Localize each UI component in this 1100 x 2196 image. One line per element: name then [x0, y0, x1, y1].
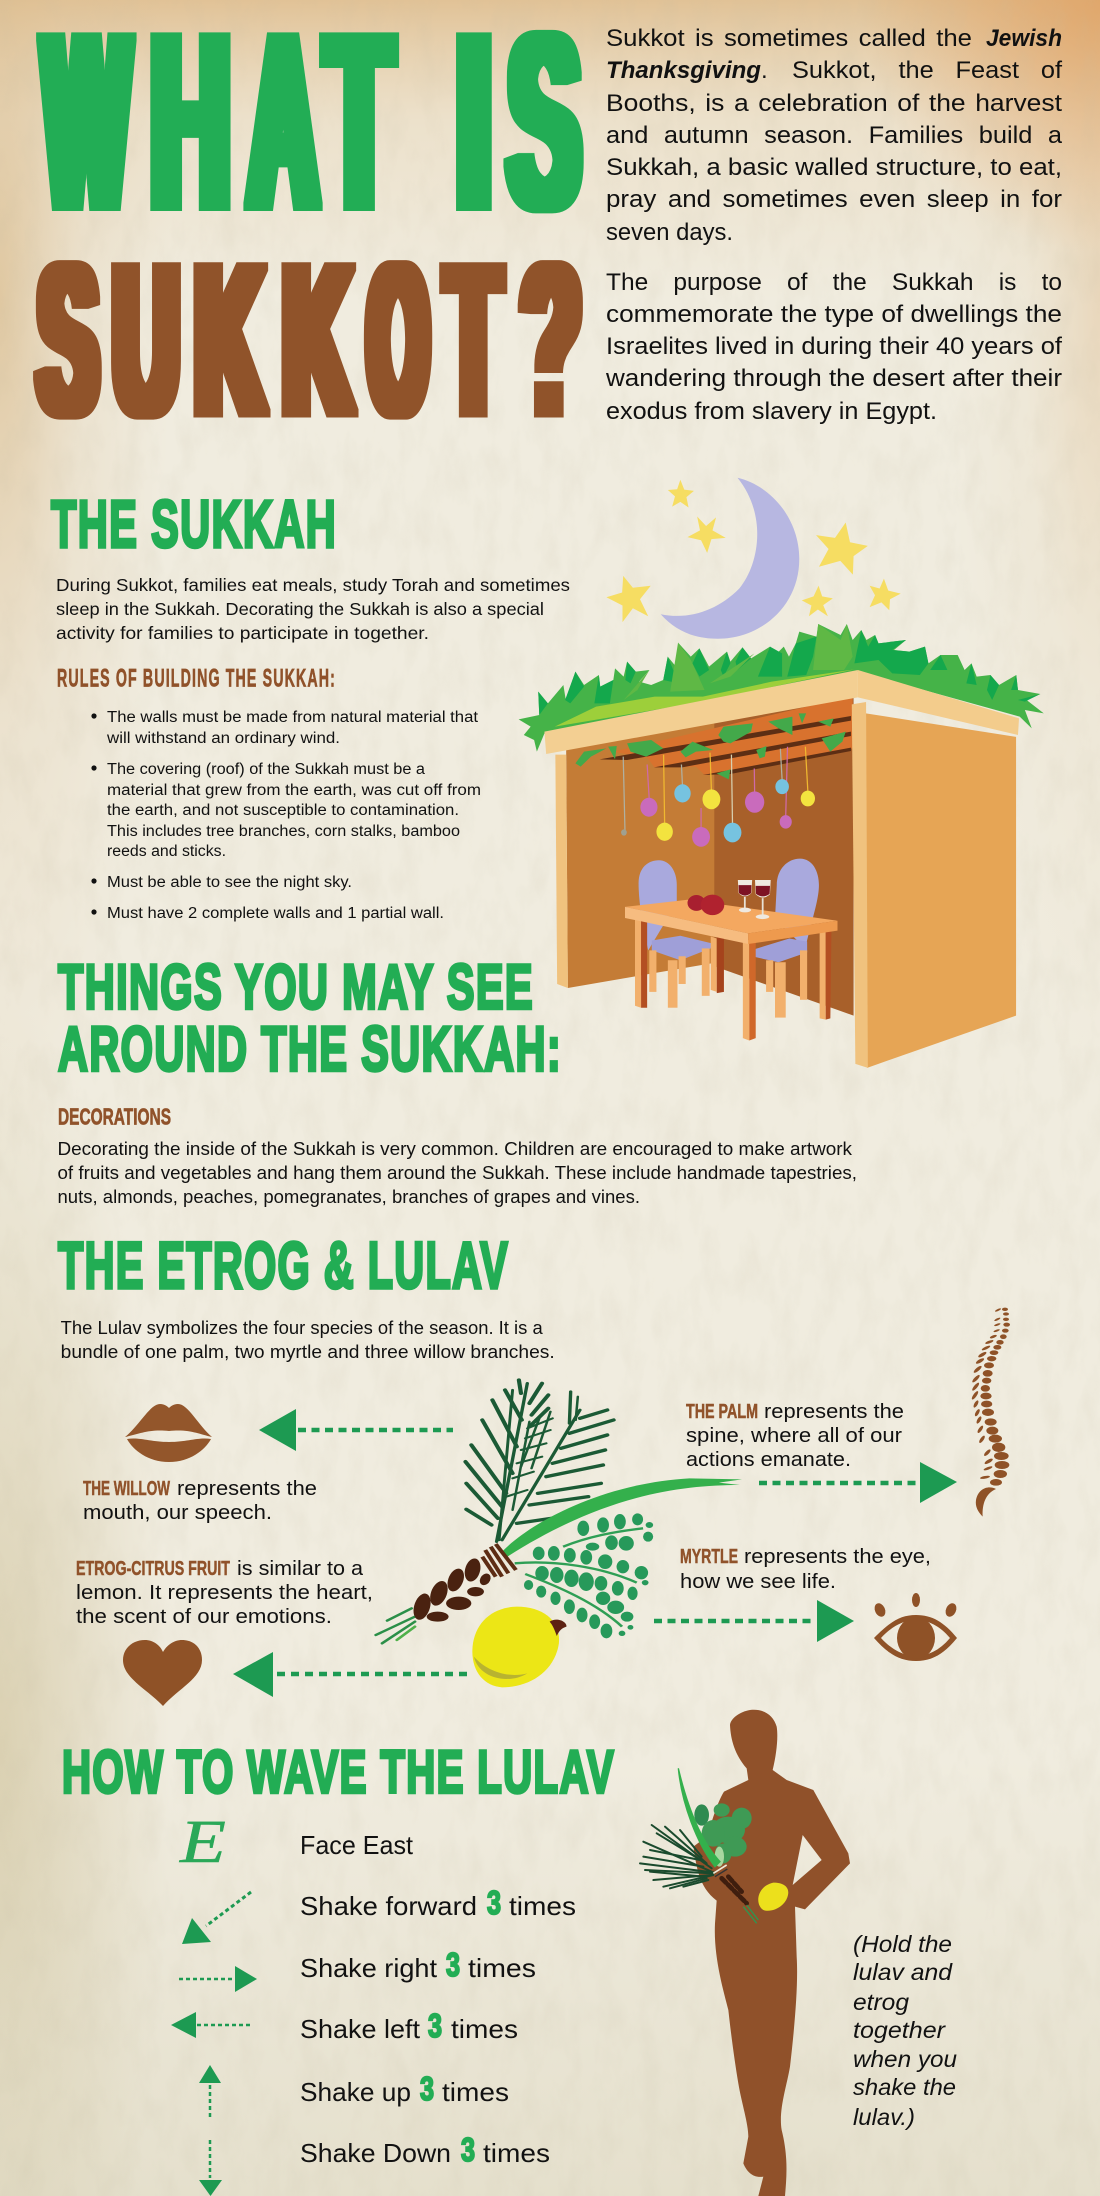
rafters — [613, 696, 853, 775]
person: etrog — [758, 1883, 788, 1911]
person: lulav frond — [678, 1768, 720, 1867]
sukkah: roof beam right — [858, 670, 1019, 735]
text: myrtle: how we see life. — [680, 1571, 836, 1593]
sukkah: inner left wall — [566, 705, 718, 988]
text: myrtle — [680, 1546, 931, 1593]
intro text: first paragraph: Sukkah, a basic walled structure, to eat, — [606, 154, 1062, 181]
heading: the sukkah: THE SUKKAH — [51, 487, 337, 562]
step: shake down — [300, 2131, 550, 2168]
arrow: etrog to heart — [233, 1652, 467, 1697]
step: shake right: Shake right — [300, 1953, 438, 1983]
intro text: first paragraph: Sukkot is sometimes called the — [606, 25, 972, 52]
sukkah: front post — [852, 702, 868, 1068]
person: myrtle leaves — [694, 1803, 752, 1867]
step: shake up: times — [442, 2077, 509, 2107]
arrow: down — [199, 2140, 222, 2196]
sukkah: wine glasses — [738, 880, 771, 919]
lulav: brown holder — [411, 1557, 493, 1622]
bullet list: rules: The covering (roof) of the Sukkah must be a — [107, 761, 425, 778]
subheading: decorations: DECORATIONS — [58, 1104, 171, 1130]
sukkah: roof greenery — [519, 624, 1044, 752]
intro text: first paragraph: Jewish — [986, 25, 1062, 52]
icon: eye — [873, 1593, 958, 1661]
intro text: second paragraph: The purpose of the Sukkah is to — [606, 269, 1062, 296]
text: lulav description — [61, 1318, 555, 1362]
text: the palm: represents the — [764, 1401, 904, 1423]
text: the palm — [686, 1401, 904, 1471]
intro text: first paragraph: Sukkot, the Feast of — [792, 57, 1062, 84]
arrow: lulav to lips — [259, 1409, 453, 1451]
heading: things you may see around the sukkah: AROUND THE SUKKAH: — [58, 1014, 562, 1084]
person: binding and holder — [713, 1865, 758, 1923]
text: sukkah description — [56, 575, 570, 643]
text: myrtle: represents the eye, — [744, 1546, 931, 1568]
intro text: second paragraph: exodus from slavery in Egypt. — [606, 398, 937, 425]
step: shake forward: times — [509, 1891, 576, 1921]
icon: spine — [971, 1308, 1010, 1517]
step: face east: Face East — [300, 1830, 414, 1860]
etrog fruit — [472, 1607, 567, 1687]
text: the willow: THE WILLOW — [83, 1478, 170, 1500]
text: lulav description: The Lulav symbolizes the four species of the season. It is a — [61, 1318, 544, 1338]
sukkah: left post — [555, 755, 568, 988]
step: shake left: 3 — [428, 2007, 442, 2044]
step: shake down: Shake Down — [300, 2138, 451, 2168]
title line: SUKKOT? — [38, 220, 580, 460]
title: what is sukkot — [38, 0, 580, 460]
intro text: second paragraph: Israelites lived in during their 40 years of — [606, 333, 1062, 360]
text: ? — [521, 220, 580, 460]
text: decorations description: nuts, almonds, peaches, pomegranates, branches of grapes and vines. — [58, 1186, 640, 1207]
sukkah: back wall — [714, 681, 854, 1016]
text: etrog citrus fruit: is similar to a — [237, 1558, 364, 1580]
text: the palm: actions emanate. — [686, 1449, 851, 1471]
step: shake up — [300, 2070, 509, 2107]
text: the willow: represents the — [177, 1478, 317, 1500]
hanging leaves — [575, 713, 846, 779]
title line: SUKKOT?: U — [114, 220, 178, 460]
text: etrog citrus fruit — [76, 1558, 373, 1628]
arrow: myrtle to eye — [654, 1600, 854, 1642]
text: the willow: mouth, our speech. — [83, 1502, 272, 1524]
step: shake forward — [300, 1884, 576, 1921]
arrow: left — [171, 2012, 250, 2038]
lulav: long green frond — [502, 1478, 742, 1557]
step: shake right — [300, 1946, 536, 1983]
step: shake right: times — [468, 1953, 536, 1983]
text: etrog citrus fruit: ETROG-CITRUS FRUIT — [76, 1558, 230, 1580]
intro text: first paragraph: seven days. — [606, 219, 733, 246]
sukkah: rafters and hanging leaves — [575, 696, 853, 779]
bullet list: rules: Must be able to see the night sky. — [107, 874, 352, 891]
arrow: forward — [182, 1892, 251, 1944]
step: shake left: Shake left — [300, 2014, 421, 2044]
title line: SUKKOT?: T — [446, 220, 500, 460]
sukkah: chairs — [639, 859, 819, 1018]
text: myrtle: MYRTLE — [680, 1546, 738, 1568]
intro text: second paragraph: wandering through the desert after their — [605, 365, 1062, 392]
text: hold the lulav note: lulav.) — [853, 2104, 915, 2130]
text: hold the lulav note: etrog — [853, 1989, 909, 2015]
illustration: lulav and etrog — [376, 1380, 742, 1687]
arrow: palm to spine — [759, 1462, 957, 1503]
step: shake forward: 3 — [487, 1884, 501, 1921]
intro text: first paragraph: and autumn season. Families build a — [606, 122, 1063, 149]
text: the willow — [83, 1478, 317, 1524]
arrow: up — [199, 2065, 221, 2119]
person silhouette — [693, 1710, 850, 2196]
step: shake forward: Shake forward — [300, 1891, 477, 1921]
illustration: person holding lulav and etrog — [640, 1710, 850, 2196]
sukkah: table — [625, 880, 837, 1041]
title line: WHAT IS — [44, 0, 580, 260]
text: the palm: spine, where all of our — [686, 1425, 902, 1447]
text: decorations description — [58, 1138, 857, 1207]
sukkah: right wall — [864, 713, 1016, 1068]
sukkah: roof beam left — [544, 670, 858, 754]
step: shake up: 3 — [420, 2070, 434, 2107]
person: palm leaves — [640, 1825, 715, 1888]
bullet list: rules: The walls must be made from natural material that — [107, 709, 479, 726]
ornaments, furniture and right wall — [621, 702, 1016, 1068]
step: shake down: 3 — [461, 2131, 475, 2168]
intro text: first paragraph: . — [761, 57, 768, 84]
subheading: rules of building the sukkah: RULES OF BUILDING THE SUKKAH: — [57, 664, 336, 692]
bullet list: rules: Must have 2 complete walls and 1 partial wall. — [107, 905, 444, 922]
text: sukkah description: During Sukkot, families eat meals, study Torah and sometimes — [56, 575, 570, 595]
lulav: myrtle branches — [515, 1513, 653, 1638]
title line: SUKKOT?: O — [369, 220, 427, 460]
roof greenery and beams — [519, 624, 1044, 754]
text: sukkah description: sleep in the Sukkah. Decorating the Sukkah is also a special — [56, 599, 544, 619]
text: hold the lulav note — [853, 1931, 957, 2130]
step: shake up: Shake up — [300, 2077, 411, 2107]
arrow: right — [179, 1966, 257, 1992]
text: sukkah description: activity for families to participate in together. — [56, 623, 429, 643]
text: decorations description: of fruits and vegetables and hang them around the Sukkah. These include handmade tapestries, — [58, 1162, 857, 1183]
intro text: first paragraph — [606, 25, 1063, 246]
lulav: palm branch — [465, 1380, 614, 1542]
lulav: willow leaves at base — [376, 1608, 415, 1643]
title line: SUKKOT?: K — [195, 220, 264, 460]
title line: SUKKOT?: K — [283, 220, 352, 460]
intro text: second paragraph: commemorate the type of dwellings the — [606, 301, 1062, 328]
heading: the etrog and lulav: THE ETROG & LULAV — [58, 1228, 509, 1302]
icon: lips — [125, 1404, 212, 1462]
moon, stars and back walls — [555, 478, 901, 1016]
step: shake left: times — [451, 2014, 518, 2044]
text: hold the lulav note: when you — [853, 2046, 957, 2072]
text: lulav description: bundle of one palm, two myrtle and three willow branches. — [61, 1342, 555, 1362]
icon: letter E for east: E — [179, 1809, 226, 1876]
bullet list: rules: the earth, and not susceptible to contamination. — [107, 802, 459, 819]
title line: SUKKOT?: S — [38, 220, 97, 460]
text: hold the lulav note: (Hold the — [853, 1931, 952, 1957]
sukkah: pomegranates — [687, 895, 724, 915]
step: shake right: 3 — [446, 1946, 460, 1983]
text: the palm: THE PALM — [686, 1401, 758, 1423]
intro text: second paragraph — [605, 269, 1062, 425]
icon: crescent moon — [661, 478, 799, 639]
bullet list: rules — [91, 709, 481, 922]
text: hold the lulav note: together — [853, 2017, 946, 2043]
heading: things you may see around the sukkah — [58, 952, 562, 1084]
illustration: moon, stars and sukkah — [519, 478, 1044, 1068]
bullet list: rules: will withstand an ordinary wind. — [106, 730, 340, 747]
text: etrog citrus fruit: the scent of our emotions. — [76, 1606, 332, 1628]
text: decorations description: Decorating the inside of the Sukkah is very common. Children are encouraged to make artwork — [58, 1138, 853, 1159]
step: shake left — [300, 2007, 518, 2044]
bullet list: rules: This includes tree branches, corn stalks, bamboo — [107, 823, 460, 840]
icon: heart — [123, 1640, 202, 1706]
text: hold the lulav note: shake the — [853, 2074, 956, 2100]
text: etrog citrus fruit: lemon. It represents the heart, — [76, 1582, 373, 1604]
heading: things you may see around the sukkah: THINGS YOU MAY SEE — [58, 952, 534, 1022]
intro text: first paragraph: Thanksgiving — [606, 57, 761, 84]
lulav: binding — [482, 1544, 516, 1577]
icons: stars — [606, 480, 901, 622]
text: hold the lulav note: lulav and — [853, 1959, 953, 1985]
intro text: first paragraph: Booths, is a celebration of the harvest — [606, 90, 1062, 117]
bullet list: rules: reeds and sticks. — [107, 843, 226, 860]
intro text: first paragraph: pray and sometimes even sleep in for — [606, 186, 1062, 213]
sukkah: hanging ornaments — [621, 747, 815, 847]
bullet list: rules: material that grew from the earth, was cut off from — [107, 782, 481, 799]
heading: how to wave the lulav: HOW TO WAVE THE LULAV — [62, 1738, 615, 1806]
step: shake down: times — [483, 2138, 550, 2168]
